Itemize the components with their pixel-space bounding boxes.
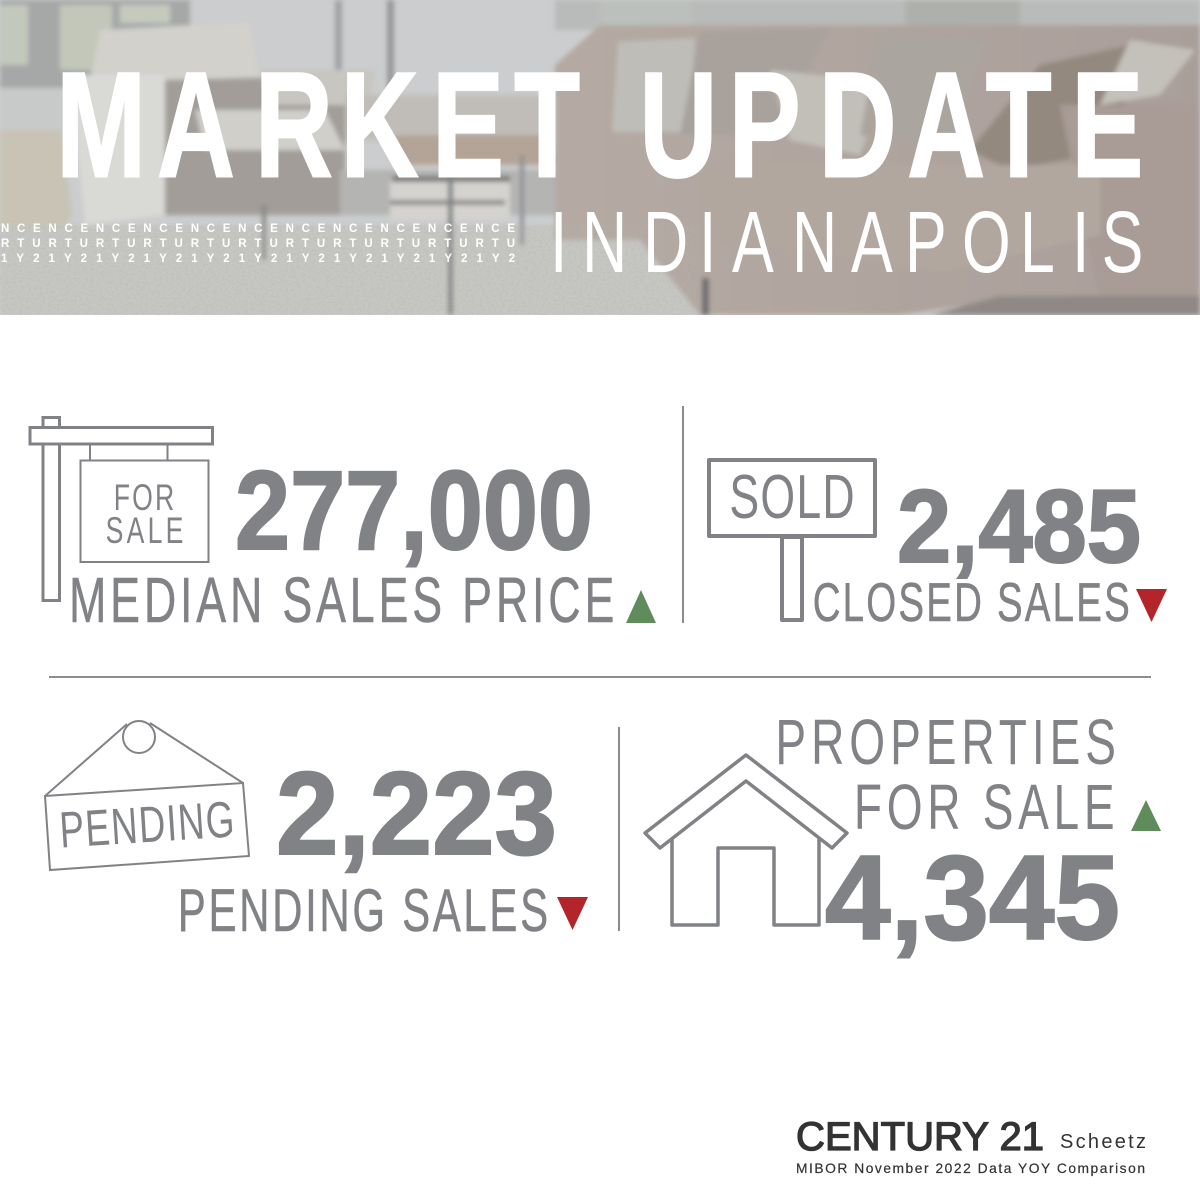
repeating brand ticker text [1, 223, 515, 265]
icon: for sale sign [30, 418, 212, 600]
arrow: down red [557, 897, 588, 930]
arrow: up green [1131, 800, 1161, 831]
title: market update [56, 41, 1143, 209]
repeating brand ticker text: NCENCENCENCENCENCENCENCENCENCENCE [1, 223, 515, 235]
icon: sold sign: SOLD [729, 463, 855, 532]
label: pending sales: PENDING SALES [178, 877, 548, 944]
arrow: up green [626, 590, 656, 623]
vertical divider top [682, 406, 684, 623]
logo: scheetz: Scheetz [1060, 1131, 1146, 1153]
value: 2,223: 2,223 [276, 748, 557, 880]
logo: century 21: CENTURY 21 [796, 1115, 1044, 1159]
stat: median sales price [69, 448, 656, 636]
repeating brand ticker text: 1Y21Y21Y21Y21Y21Y21Y21Y21Y21Y21Y2 [1, 253, 515, 265]
icon: house [645, 755, 847, 925]
icon: sold sign [709, 460, 875, 620]
stat: pending sales [178, 748, 588, 944]
source note: MIBOR November 2022 Data YOY Comparison [796, 1161, 1145, 1176]
label: closed sales: CLOSED SALES [813, 572, 1130, 634]
header banner photo [0, 0, 1200, 315]
value: 4,345: 4,345 [825, 831, 1120, 965]
stat: properties for sale [775, 707, 1161, 965]
subtitle: Indianapolis: INDIANAPOLIS [550, 194, 1143, 292]
label: median sales price: MEDIAN SALES PRICE [69, 564, 614, 636]
icon: pending hanging sign [45, 721, 249, 870]
value: 2,485: 2,485 [897, 469, 1141, 585]
vertical divider bottom [618, 727, 620, 931]
icon: for sale sign: FOR [114, 477, 174, 518]
title: market update: UPDATE [639, 41, 1143, 209]
horizontal divider [49, 676, 1151, 678]
arrow: down red [1136, 589, 1167, 622]
repeating brand ticker text: RTURTURTURTURTURTURTURTURTURTURTU [1, 238, 515, 250]
title: market update: MARKET [56, 41, 580, 209]
icon: for sale sign: SALE [106, 510, 183, 551]
label: properties: PROPERTIES [775, 707, 1116, 778]
rug texture [0, 225, 700, 315]
icon: pending hanging sign: PENDING [58, 792, 236, 859]
stat: closed sales [813, 469, 1167, 634]
label: for sale: FOR SALE [854, 772, 1115, 843]
value: 277,000: 277,000 [235, 448, 593, 573]
footer logo and source [796, 1115, 1146, 1176]
